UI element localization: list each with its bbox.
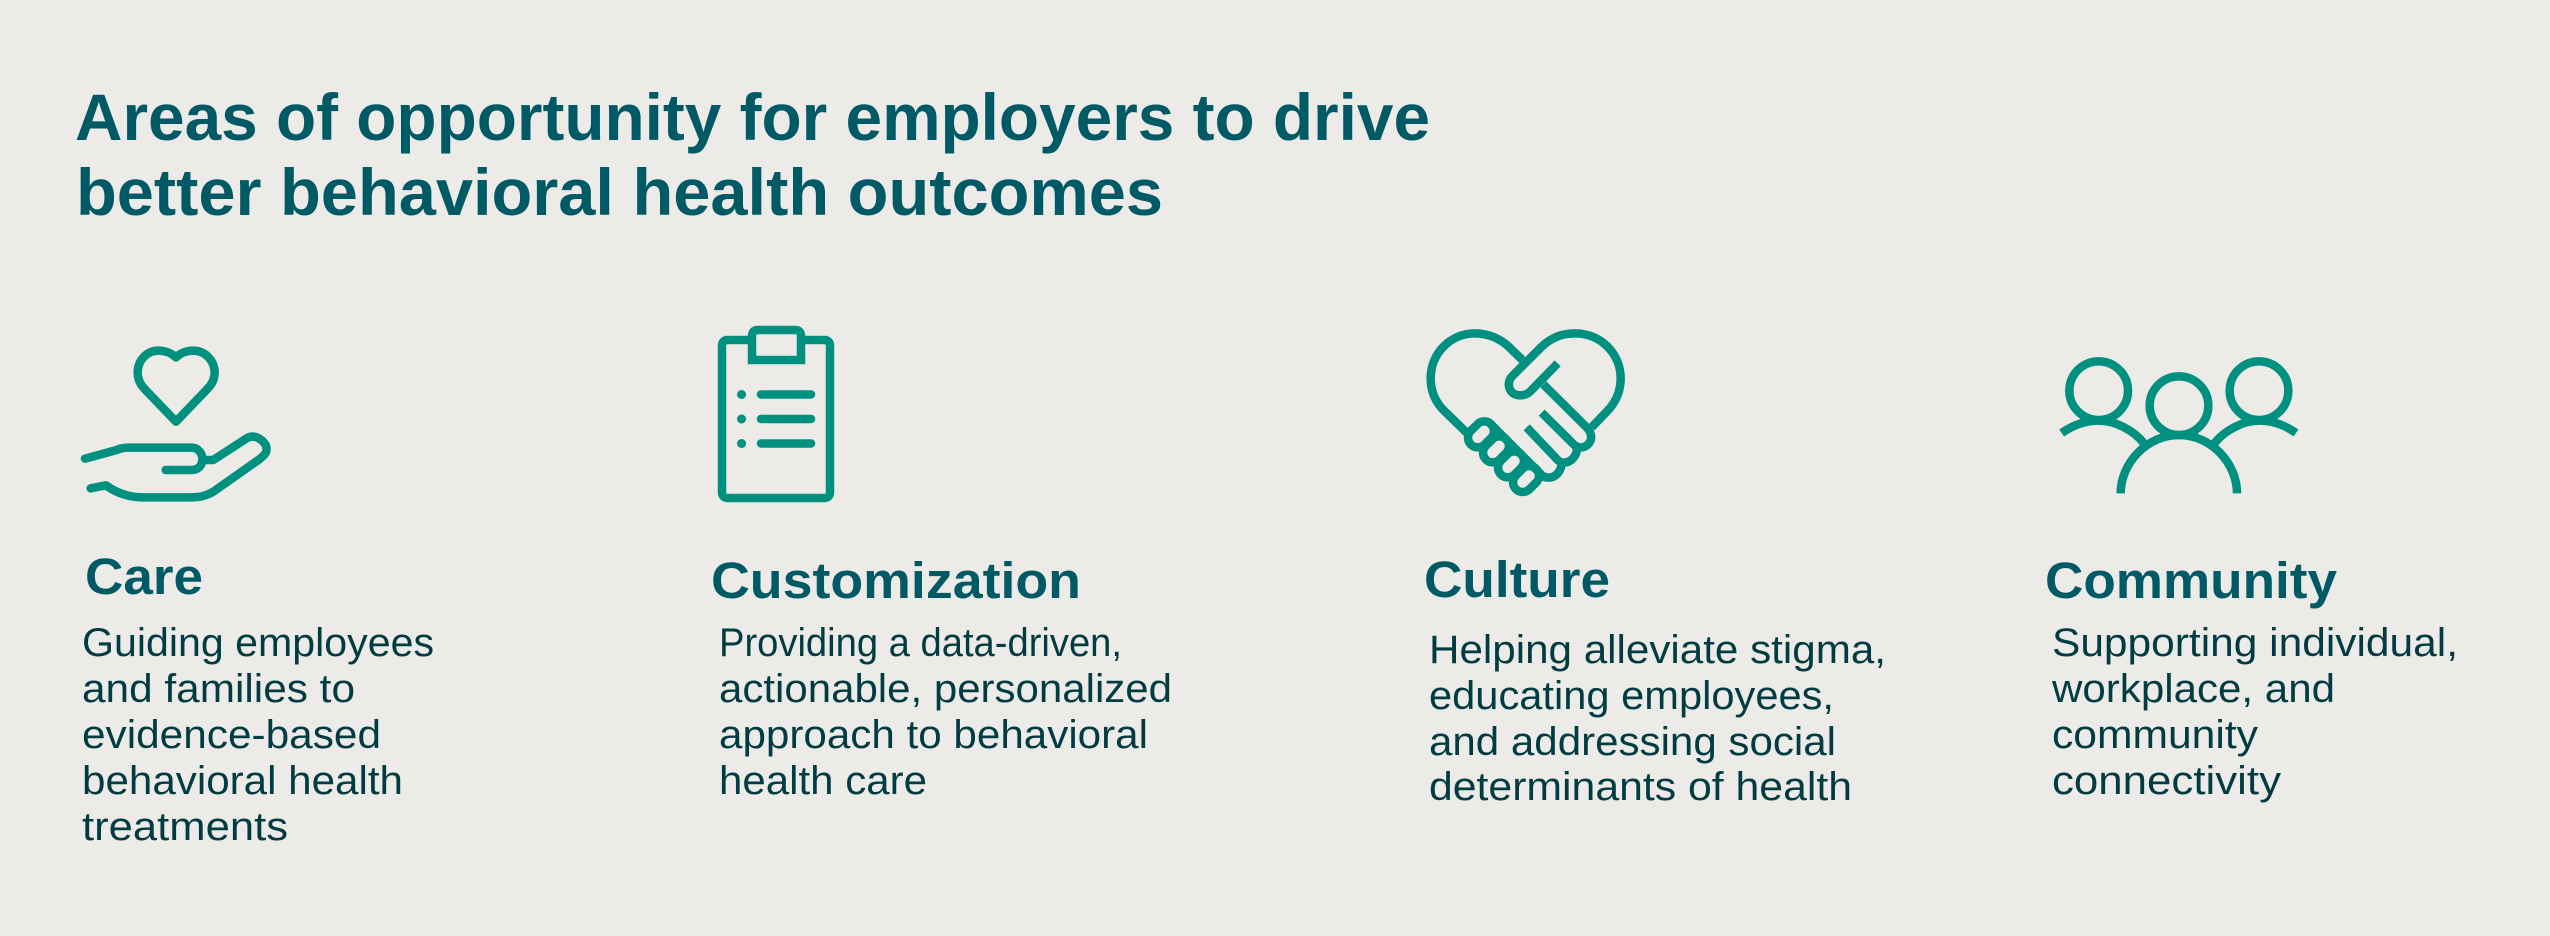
heading: Culture: Culture — [1424, 551, 1610, 608]
panel: culture — [1424, 333, 1886, 809]
text: culture description: determinants of health — [1429, 765, 1852, 809]
text: customization description: health care — [719, 759, 927, 803]
panel: community — [2045, 361, 2458, 803]
text: culture description: Helping alleviate stigma, — [1429, 628, 1886, 672]
panel: customization — [711, 330, 1172, 803]
text: customization description: Providing a data-driven, — [719, 621, 1122, 665]
icon: clipboard checklist — [722, 330, 830, 498]
text: culture description: educating employees, — [1429, 674, 1834, 718]
text: customization description — [719, 621, 1172, 803]
title: better behavioral health outcomes — [76, 155, 1163, 229]
text: community description: workplace, and — [2051, 667, 2335, 711]
heading: Care: Care — [85, 548, 203, 605]
icon: handshake heart — [1431, 333, 1621, 496]
panel: care — [82, 351, 434, 849]
text: culture description: and addressing social — [1429, 720, 1836, 764]
text: care description — [82, 621, 434, 849]
text: care description: evidence-based — [82, 713, 381, 757]
text: customization description: approach to behavioral — [719, 713, 1148, 757]
text: care description: Guiding employees — [82, 621, 434, 665]
text: culture description — [1429, 628, 1886, 809]
text: care description: behavioral health — [82, 759, 403, 803]
text: care description: treatments — [82, 805, 288, 849]
heading: Customization: Customization — [711, 552, 1081, 609]
text: care description: and families to — [82, 667, 355, 711]
title: Areas of opportunity for employers to drive — [75, 80, 1430, 154]
text: community description: Supporting individual, — [2052, 621, 2458, 665]
heading: Community: Community — [2045, 552, 2338, 609]
text: community description — [2051, 621, 2458, 803]
text: community description: connectivity — [2052, 759, 2281, 803]
title — [75, 80, 1430, 229]
text: community description: community — [2052, 713, 2258, 757]
icon: heart over open hand — [85, 351, 267, 497]
text: customization description: actionable, personalized — [719, 667, 1172, 711]
icon: three people — [2062, 361, 2296, 493]
